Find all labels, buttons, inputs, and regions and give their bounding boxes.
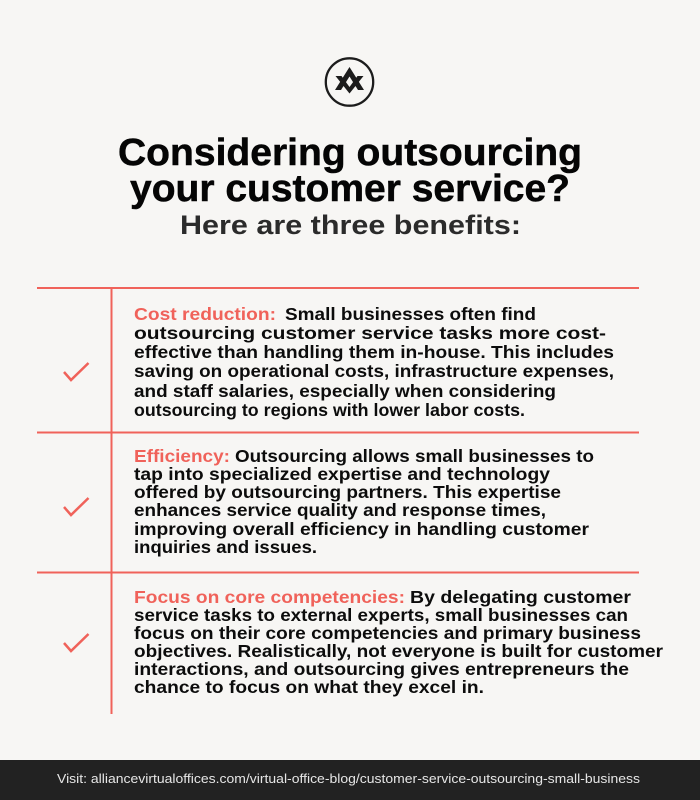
- panel: cost reduction: Small businesses often find: [285, 304, 536, 324]
- panel: cost reduction: outsourcing customer service tasks more cost-: [134, 323, 606, 343]
- icon: check mark 3: [64, 634, 88, 651]
- title: your customer service?: [130, 168, 570, 210]
- panel: cost reduction: Cost reduction:: [134, 304, 276, 324]
- panel: efficiency: inquiries and issues.: [134, 537, 317, 557]
- subtitle: Here are three benefits:: [180, 210, 521, 240]
- table rule lines: [37, 288, 639, 714]
- footer bar: Visit: alliancevirtualoffices.com/virtual-office-blog/customer-service-outsourcing-small-business: [57, 771, 641, 786]
- panel: focus on core competencies: Focus on core competencies:: [134, 587, 405, 607]
- footer bar: [0, 760, 700, 800]
- panel: focus on core competencies: chance to focus on what they excel in.: [134, 677, 484, 697]
- icon: check mark 2: [64, 498, 88, 515]
- panel: cost reduction: [134, 304, 614, 420]
- panel: efficiency: enhances service quality and response times,: [134, 500, 546, 520]
- panel: focus on core competencies: service tasks to external experts, small businesses can: [134, 605, 628, 625]
- panel: efficiency: offered by outsourcing partners. This expertise: [134, 482, 561, 502]
- panel: focus on core competencies: By delegating customer: [410, 587, 631, 607]
- icon: check mark 1: [64, 363, 88, 380]
- panel: focus on core competencies: [134, 587, 663, 697]
- panel: cost reduction: effective than handling them in-house. This includes: [134, 342, 614, 362]
- panel: focus on core competencies: focus on their core competencies and primary business: [134, 623, 641, 643]
- icon: logo: [326, 58, 373, 106]
- panel: cost reduction: saving on operational costs, infrastructure expenses,: [134, 361, 614, 381]
- panel: cost reduction: and staff salaries, especially when considering: [134, 381, 556, 401]
- panel: efficiency: improving overall efficiency in handling customer: [134, 519, 589, 539]
- panel: focus on core competencies: interactions, and outsourcing gives entrepreneurs the: [134, 659, 629, 679]
- panel: efficiency: Efficiency:: [134, 446, 230, 466]
- panel: focus on core competencies: objectives. Realistically, not everyone is built for customer: [134, 641, 663, 661]
- panel: efficiency: tap into specialized expertise and technology: [134, 464, 550, 484]
- panel: cost reduction: outsourcing to regions with lower labor costs.: [134, 400, 525, 420]
- panel: efficiency: [134, 446, 594, 557]
- title: Considering outsourcing: [118, 132, 582, 174]
- title: [118, 132, 582, 210]
- panel: efficiency: Outsourcing allows small businesses to: [235, 446, 594, 466]
